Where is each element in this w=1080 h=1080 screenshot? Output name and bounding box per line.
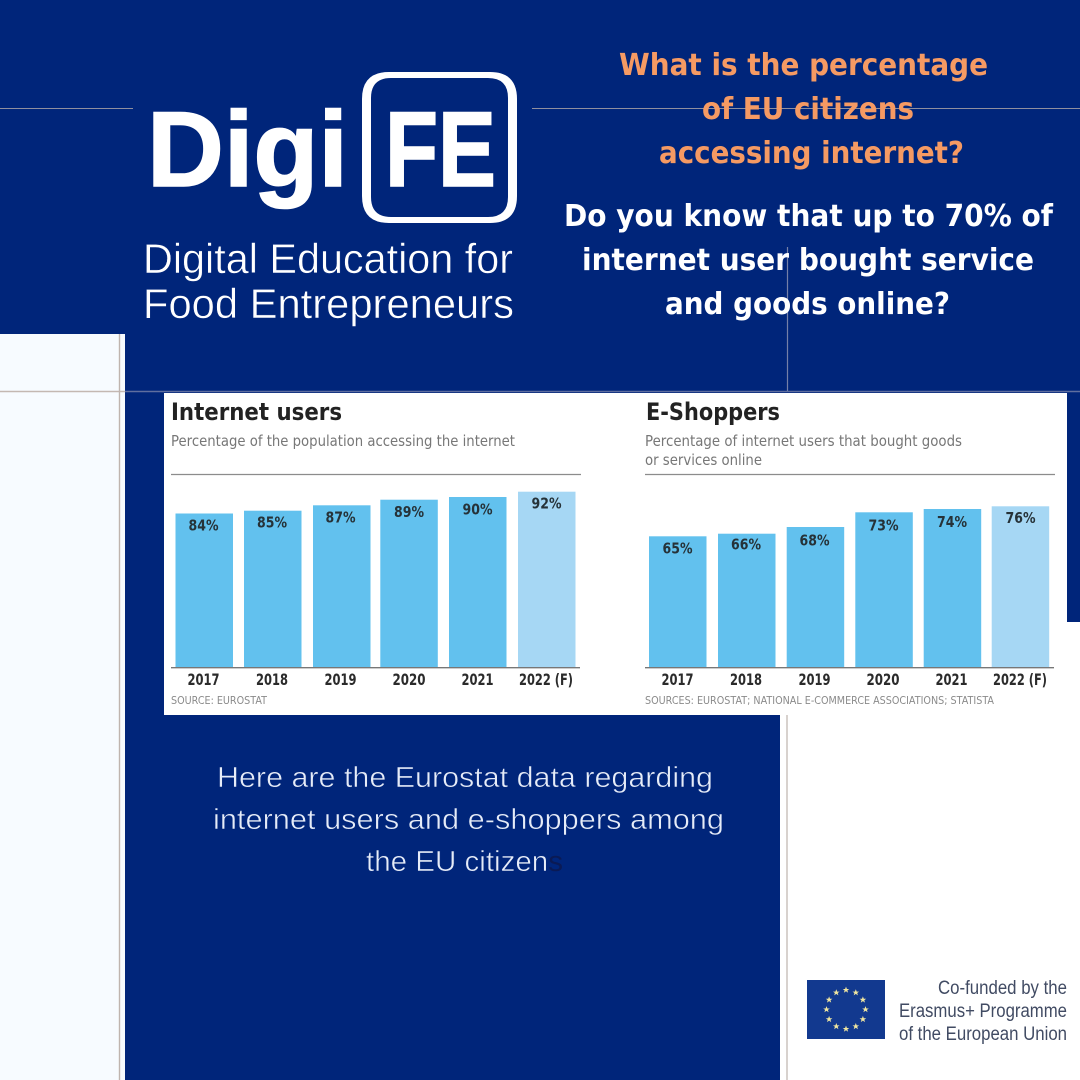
chart title: Internet users xyxy=(171,398,342,426)
logo: DigiFE xyxy=(143,72,517,327)
bars xyxy=(649,506,1049,668)
value labels: 66% xyxy=(731,536,761,554)
value labels: 89% xyxy=(394,503,424,521)
logo frame xyxy=(362,72,517,223)
heading: question: of EU citizens xyxy=(702,92,914,127)
value labels: 90% xyxy=(462,500,493,518)
chart subtitle: or services online xyxy=(645,451,762,469)
logo wordmark: Digi: Digi xyxy=(147,89,348,209)
year labels: 2017 xyxy=(188,670,220,689)
year labels: 2020 xyxy=(392,670,426,689)
year labels: 2017 xyxy=(662,670,694,689)
value labels: 87% xyxy=(326,508,356,526)
text block: description xyxy=(213,762,724,878)
chart: Internet users xyxy=(171,398,581,707)
bars xyxy=(176,492,576,668)
value labels: 73% xyxy=(868,516,899,534)
value labels: 76% xyxy=(1006,509,1036,527)
heading: question xyxy=(619,48,988,171)
year labels: 2019 xyxy=(324,670,356,689)
year labels: 2021 xyxy=(936,670,968,689)
chart subtitle xyxy=(645,432,962,469)
value labels: 92% xyxy=(532,494,562,512)
text block: description: internet users and e-shoppers among xyxy=(213,804,724,836)
text block: co-funded: Co-funded by the xyxy=(938,978,1067,999)
year labels: 2022 (F) xyxy=(993,670,1047,689)
heading: question: What is the percentage xyxy=(619,48,988,83)
text block: description: Here are the Eurostat data regarding xyxy=(217,762,713,794)
value labels xyxy=(188,494,562,534)
chart subtitle: Percentage of the population accessing the internet xyxy=(171,432,515,450)
value labels: 85% xyxy=(257,514,287,532)
value labels: 84% xyxy=(188,516,219,534)
year labels: 2022 (F) xyxy=(519,670,573,689)
panel: chart image background xyxy=(164,393,1067,715)
heading: question: accessing internet? xyxy=(659,136,964,171)
year labels: 2018 xyxy=(730,670,762,689)
year labels: 2018 xyxy=(256,670,288,689)
chart subtitle: Percentage of internet users that bought goods xyxy=(645,432,962,450)
value labels xyxy=(662,509,1036,558)
text block: did you know: Do you know that up to 70% of xyxy=(564,199,1054,234)
year labels: 2019 xyxy=(798,670,830,689)
value labels: 65% xyxy=(662,540,693,558)
year labels: 2020 xyxy=(866,670,900,689)
value labels: 74% xyxy=(937,513,967,531)
sources: SOURCES: EUROSTAT; NATIONAL E-COMMERCE ASSOCIATIONS; STATISTA xyxy=(645,695,995,707)
logo tagline: Food Entrepreneurs xyxy=(143,280,514,327)
year labels xyxy=(188,670,573,689)
value labels: 68% xyxy=(800,532,830,550)
icon: EU flag xyxy=(807,980,885,1039)
panel: lower right white area xyxy=(780,622,1080,1080)
year labels xyxy=(662,670,1047,689)
logo tagline: Digital Education for xyxy=(143,235,513,282)
text block: did you know: internet user bought service xyxy=(582,243,1034,278)
text block: did you know xyxy=(564,199,1054,322)
year labels: 2021 xyxy=(462,670,494,689)
logo wordmark: FE: FE xyxy=(385,89,496,209)
text block: co-funded xyxy=(899,978,1067,1045)
panel: left white strip xyxy=(0,334,125,1080)
text block: did you know: and goods online? xyxy=(665,287,950,322)
source: SOURCE: EUROSTAT xyxy=(171,695,268,707)
chart: E-Shoppers xyxy=(645,398,1055,707)
text block: description: the EU citizens xyxy=(366,846,563,878)
chart title: E-Shoppers xyxy=(646,398,780,426)
